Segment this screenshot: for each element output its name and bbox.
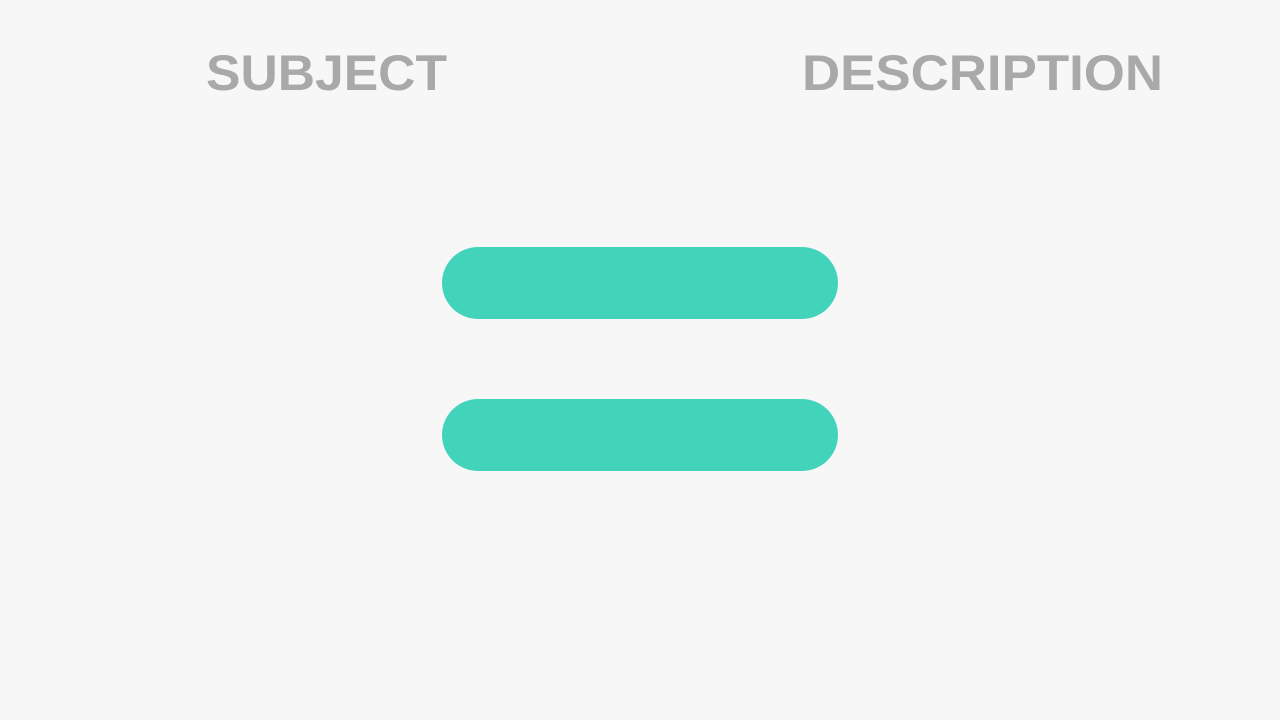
top bar [442,247,838,319]
heading: description: DESCRIPTION [802,45,1163,101]
bottom bar [442,399,838,471]
equals sign icon [442,247,838,471]
heading: subject: SUBJECT [206,45,447,101]
